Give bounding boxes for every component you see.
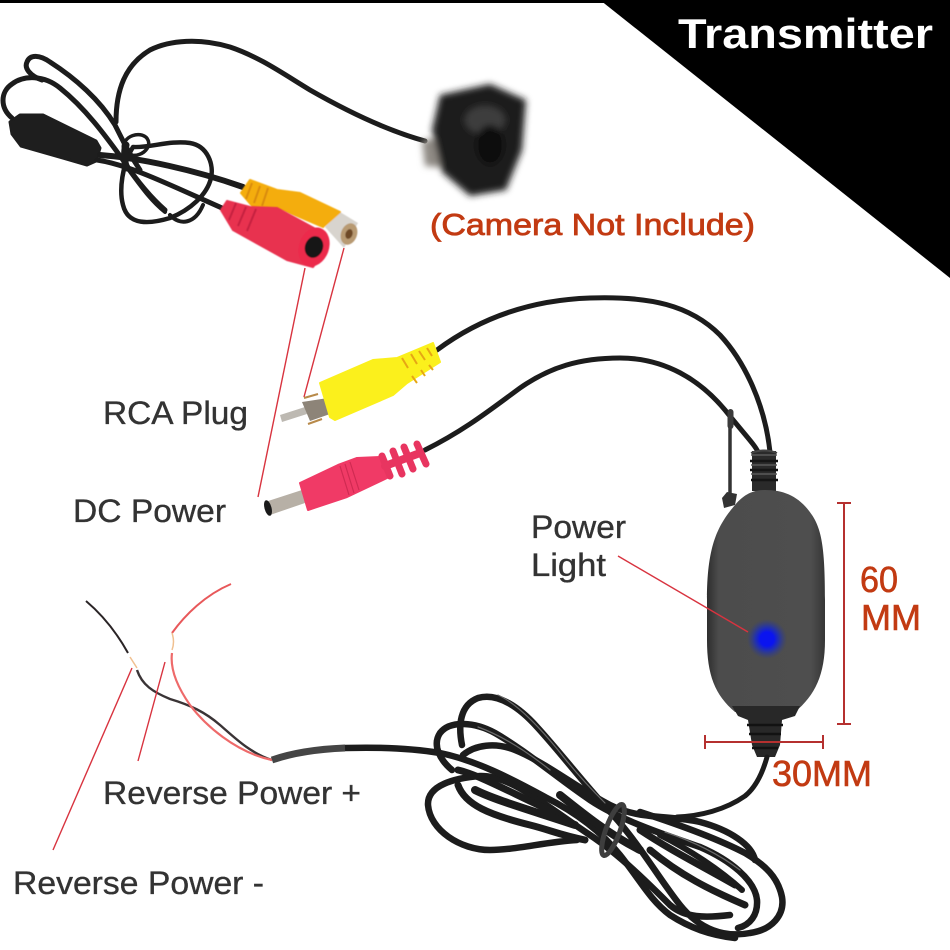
height dimension line	[837, 503, 851, 724]
red wire	[172, 584, 231, 633]
black corner banner	[0, 0, 950, 278]
top strain relief	[750, 450, 778, 491]
yellow RCA plug and cable	[280, 298, 770, 452]
camera cable	[116, 41, 425, 141]
leader line: reverse power plus	[138, 662, 165, 761]
height label: 60	[860, 559, 898, 600]
coiled cable bundle	[345, 695, 782, 938]
leader line: power light	[618, 556, 748, 632]
red socket	[221, 201, 335, 271]
cable tie ring	[597, 802, 629, 858]
caption: camera not included: (Camera Not Include)	[430, 207, 755, 242]
title: Transmitter	[678, 10, 933, 57]
transmitter module	[677, 412, 825, 817]
width label: 30MM	[772, 753, 872, 794]
label: Reverse Power +: Reverse Power +	[103, 775, 361, 811]
label: DC Power: DC Power	[73, 493, 226, 529]
label: Power Light: Light	[531, 547, 606, 583]
width dimension line	[705, 735, 823, 749]
camera photo with cable and plugs	[3, 41, 526, 271]
camera head	[422, 84, 526, 196]
label: RCA Plug: RCA Plug	[103, 395, 248, 431]
antenna	[722, 412, 737, 508]
label: Power Light: Power	[531, 509, 626, 545]
label: Reverse Power -: Reverse Power -	[13, 865, 264, 901]
bottom strain relief	[732, 706, 800, 757]
sheathed cable end	[272, 748, 345, 760]
LED power light	[747, 619, 787, 659]
stripped reverse wires	[86, 584, 345, 760]
yellow socket	[241, 180, 360, 248]
leader line: RCA plug	[304, 248, 344, 397]
height label: MM	[861, 597, 921, 638]
bundled cable loops	[3, 56, 243, 222]
enclosure	[707, 490, 825, 712]
label: Power Light	[531, 509, 626, 583]
height label	[860, 559, 921, 638]
black wire	[86, 601, 128, 653]
red DC plug and cable	[263, 358, 758, 517]
ferrite bead	[10, 115, 100, 165]
leader line: reverse power minus	[53, 668, 132, 850]
output cable	[677, 757, 767, 817]
leader line: DC power	[258, 268, 305, 497]
